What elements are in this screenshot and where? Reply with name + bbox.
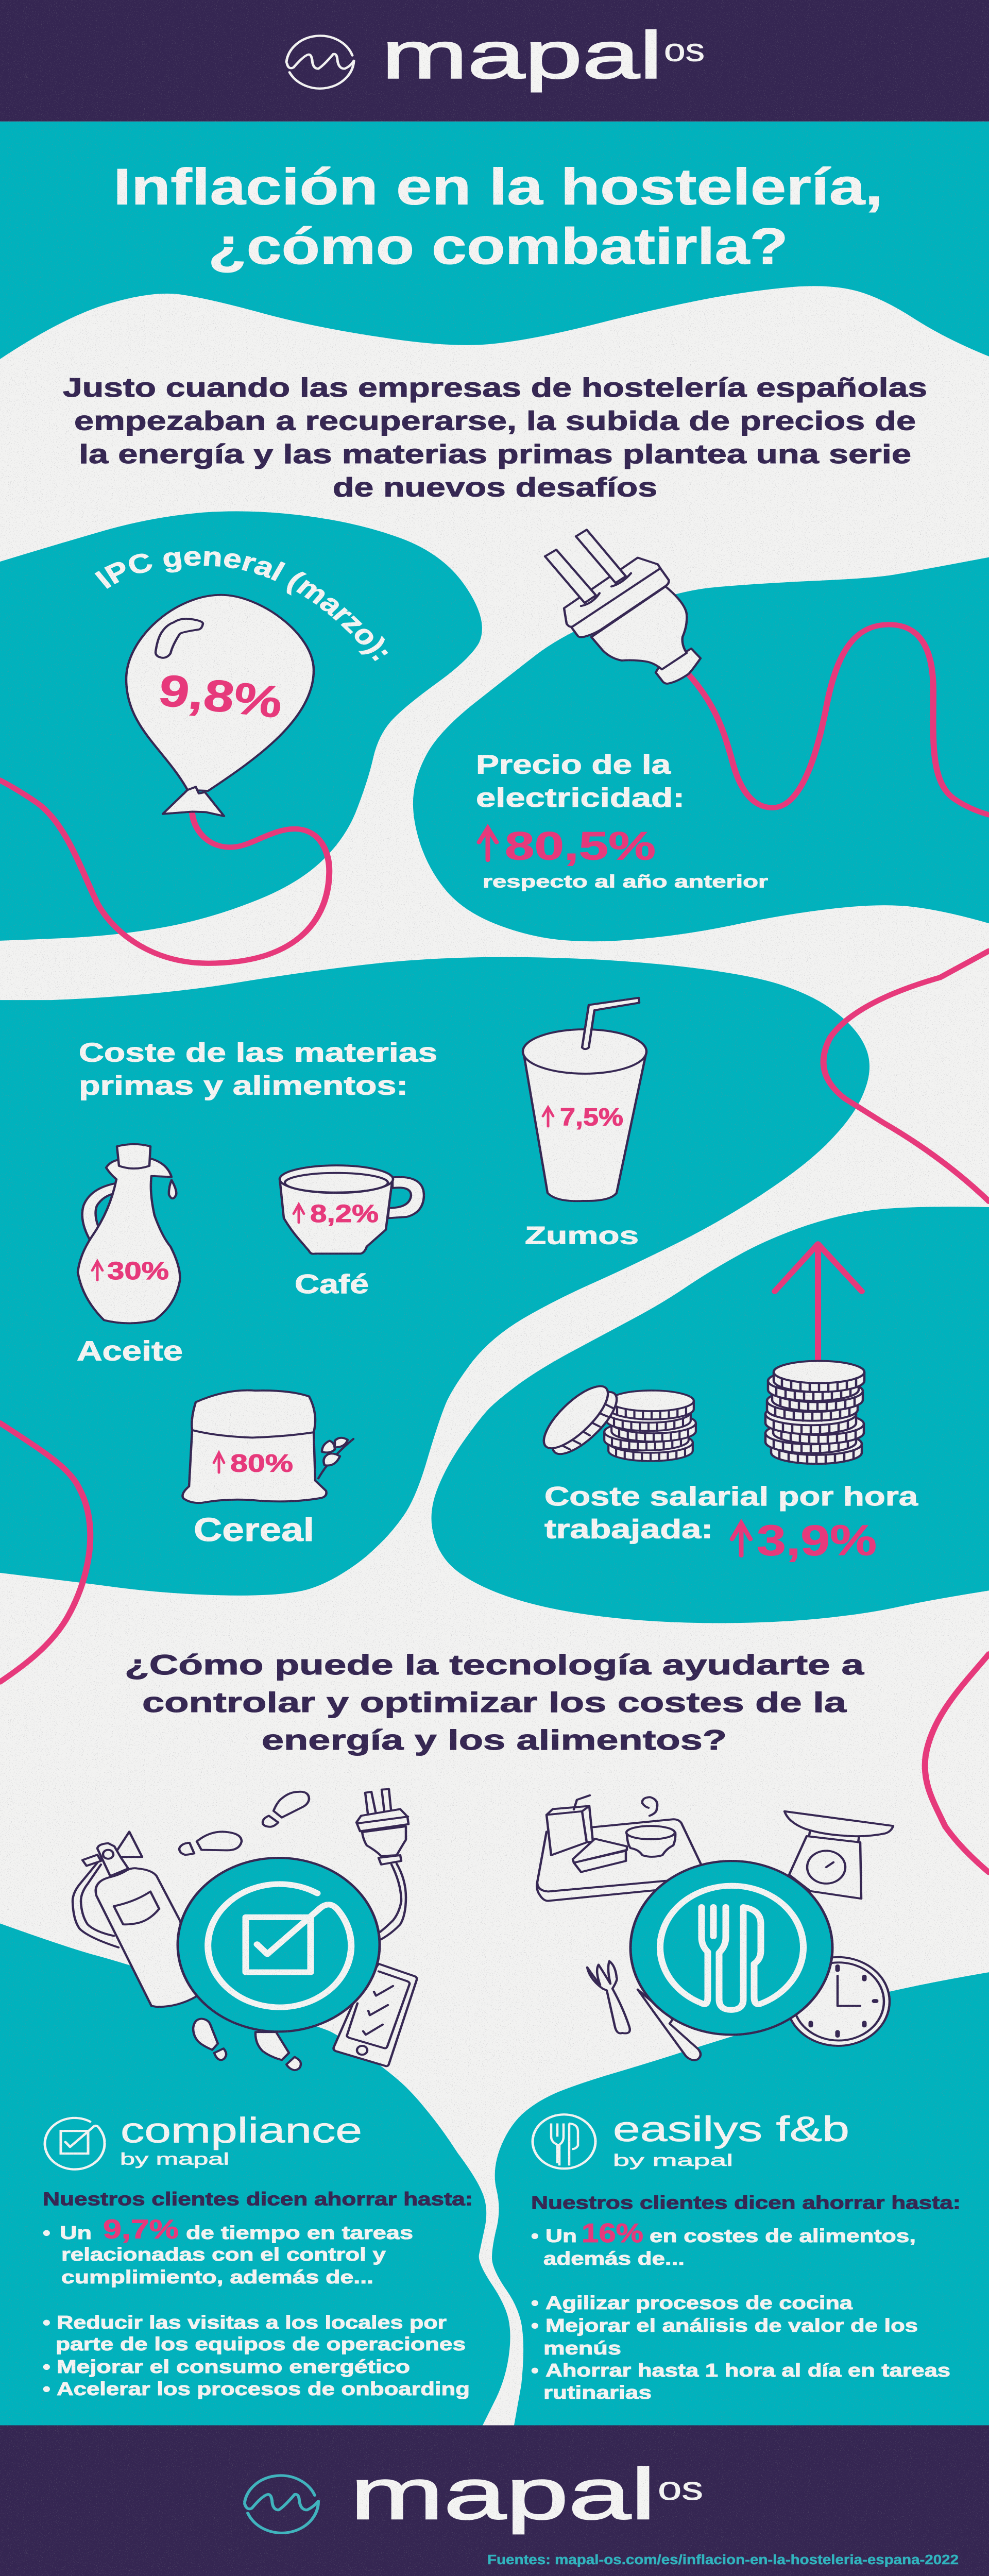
icon: left coin stack xyxy=(604,1391,696,1461)
icon: cutlery circle xyxy=(630,1861,832,2035)
text block: easilys benefits: Agilizar procesos de cocina xyxy=(545,2293,853,2313)
icon: compliance circle xyxy=(178,1858,380,2031)
salary text: trabajada: xyxy=(544,1514,713,1544)
text block: easilys benefits: • xyxy=(531,2293,539,2313)
text block: compliance benefits: • xyxy=(43,2379,50,2399)
text block: compliance benefits: • xyxy=(43,2313,50,2333)
illustration: food items xyxy=(537,1795,893,2060)
intro paragraph: de nuevos desafíos xyxy=(333,472,657,502)
technology heading: ¿Cómo puede la tecnología ayudarte a xyxy=(125,1649,864,1681)
icon: kitchen scale xyxy=(785,1811,893,1899)
electricity text: respecto al año anterior xyxy=(483,871,768,891)
text block: compliance benefits: Mejorar el consumo energético xyxy=(57,2357,410,2377)
icon: coffee cup xyxy=(626,1826,675,1857)
panel: compliance teal blob xyxy=(0,1923,510,2425)
text block: easilys benefits: • xyxy=(531,2360,539,2381)
arrow: oil up xyxy=(92,1261,103,1280)
arrow: electricity up xyxy=(479,828,497,860)
technology heading xyxy=(125,1649,864,1756)
icon: oil bottle xyxy=(78,1144,180,1323)
text block: compliance benefits xyxy=(43,2189,473,2399)
footer band xyxy=(0,2425,989,2576)
text block: compliance benefits: Acelerar los procesos de onboarding xyxy=(57,2379,470,2399)
intro paragraph: la energía y las materias primas plantea una serie xyxy=(79,439,911,469)
text block: easilys benefits: rutinarias xyxy=(543,2382,652,2403)
title xyxy=(113,158,883,275)
cereal percentage: 80% xyxy=(230,1450,293,1478)
logo: compliance: compliance xyxy=(121,2110,362,2150)
text block: compliance benefits: Un xyxy=(60,2223,92,2243)
footer logo: os xyxy=(658,2470,703,2507)
electricity percentage: 80,5% xyxy=(505,823,656,868)
text block: easilys benefits: además de... xyxy=(543,2249,685,2269)
technology heading: controlar y optimizar los costes de la xyxy=(142,1686,847,1718)
icon: standing coin xyxy=(534,1378,627,1462)
illustration: compliance items xyxy=(73,1789,417,2070)
pink wire: plug cable xyxy=(688,624,989,815)
label: Aceite: Aceite xyxy=(77,1336,183,1367)
arrow: juice up xyxy=(543,1107,553,1126)
text block: easilys benefits: Nuestros clientes dicen ahorrar hasta: xyxy=(531,2193,961,2213)
electricity text: Precio de la xyxy=(476,749,671,779)
IPC label text: IPC general (marzo): xyxy=(95,551,388,662)
icon: plug with cable xyxy=(356,1789,408,1940)
text block: compliance benefits: de tiempo en tareas xyxy=(186,2223,413,2243)
icon: fork xyxy=(587,1961,630,2033)
icon: sandwich xyxy=(573,1839,627,1872)
juice percentage: 7,5% xyxy=(560,1104,623,1131)
arrow: salary up xyxy=(775,1244,862,1360)
text block: easilys benefits: • xyxy=(531,2316,539,2336)
panel: top teal wave xyxy=(0,122,989,359)
label: Cereal: Cereal xyxy=(194,1512,314,1548)
logo: compliance: by mapal xyxy=(120,2149,229,2168)
raw materials heading: Coste de las materias xyxy=(79,1038,437,1067)
salary percentage: 3,9% xyxy=(757,1517,877,1565)
logo: easilys f&b xyxy=(533,2109,849,2170)
icon: juice cup xyxy=(523,998,646,1201)
salary text xyxy=(544,1481,918,1565)
stat: 9,7%: 9,7% xyxy=(103,2214,179,2244)
header logo xyxy=(286,18,705,92)
pink wire: balloon string xyxy=(0,780,329,963)
arrow: salary percentage up xyxy=(732,1523,751,1555)
icon: balloon xyxy=(126,595,314,816)
header band xyxy=(0,0,989,122)
footer logo xyxy=(245,2454,703,2534)
curved heading path: IPC general xyxy=(106,566,387,676)
text block: easilys benefits: Un xyxy=(545,2226,577,2246)
text block: easilys benefits: menús xyxy=(543,2338,621,2359)
icon: plug xyxy=(545,530,701,684)
arrow: cereal up xyxy=(214,1453,224,1472)
icon: right coin stack xyxy=(765,1361,864,1464)
text block: easilys benefits: en costes de alimentos, xyxy=(650,2226,916,2246)
icon: wall clock xyxy=(787,1957,890,2046)
header logo: os xyxy=(664,32,705,69)
text block: easilys benefits xyxy=(531,2193,961,2403)
icon: phone checklist xyxy=(334,1964,417,2066)
intro paragraph xyxy=(63,372,927,502)
panel: easilys teal blob xyxy=(492,1972,989,2425)
electricity text: electricidad: xyxy=(476,783,685,812)
technology heading: energía y los alimentos? xyxy=(262,1724,727,1756)
icon: coffee mug xyxy=(280,1165,424,1254)
label: Zumos: Zumos xyxy=(525,1222,639,1249)
text block: compliance benefits: relacionadas con el control y xyxy=(61,2245,386,2265)
footer logo: mapal xyxy=(350,2454,656,2534)
salary text: Coste salarial por hora xyxy=(544,1481,918,1511)
icon: juice box xyxy=(547,1795,593,1855)
raw materials heading: primas y alimentos: xyxy=(79,1070,408,1100)
icon: tray xyxy=(537,1819,708,1901)
text block: compliance benefits: Reducir las visitas a los locales por xyxy=(57,2313,447,2333)
text block: compliance benefits: cumplimiento, además de... xyxy=(61,2267,373,2287)
arrow: coffee up xyxy=(294,1205,304,1223)
intro paragraph: Justo cuando las empresas de hostelería españolas xyxy=(63,372,927,402)
stat: 16%: 16% xyxy=(582,2218,643,2248)
text block: easilys benefits: Ahorrar hasta 1 hora al día en tareas xyxy=(545,2360,950,2381)
icon: table knife xyxy=(638,1990,701,2060)
pink wire: left lower xyxy=(0,1423,90,1682)
header logo: mapal xyxy=(382,18,662,92)
icon: footprints xyxy=(179,1792,309,2070)
pink wire: right lower xyxy=(925,1654,989,1872)
logo: easilys f&b: easilys f&b xyxy=(613,2109,849,2149)
electricity text xyxy=(476,749,768,891)
panel: IPC teal blob xyxy=(0,511,482,941)
source line: Fuentes: mapal-os.com/es/inflacion-en-la-hosteleria-espana-2022 xyxy=(487,2552,959,2567)
coffee percentage: 8,2% xyxy=(310,1200,379,1228)
oil percentage: 30% xyxy=(107,1258,169,1285)
pink wire: right middle xyxy=(824,951,989,1201)
text block: easilys benefits: • xyxy=(531,2226,539,2246)
balloon percentage: 9,8% xyxy=(156,665,285,727)
text block: compliance benefits: Nuestros clientes dicen ahorrar hasta: xyxy=(43,2189,473,2210)
panel: salary teal blob xyxy=(432,1207,989,1623)
panel: raw materials teal blob xyxy=(0,957,869,1596)
logo: compliance xyxy=(45,2110,362,2170)
text block: compliance benefits: parte de los equipos de operaciones xyxy=(56,2334,466,2354)
icon: cereal sack xyxy=(182,1391,353,1503)
icon: fire extinguisher xyxy=(73,1832,197,2007)
intro paragraph: empezaban a recuperarse, la subida de precios de xyxy=(74,406,916,436)
icon: steam xyxy=(642,1797,657,1816)
title: ¿cómo combatirla? xyxy=(208,217,788,275)
title: Inflación en la hostelería, xyxy=(113,158,883,215)
raw materials heading xyxy=(79,1038,437,1100)
logo: easilys f&b: by mapal xyxy=(613,2151,733,2170)
panel: electricity teal blob xyxy=(413,557,989,941)
text block: compliance benefits: • xyxy=(43,2357,50,2377)
label: Café: Café xyxy=(295,1269,369,1299)
text block: easilys benefits: Mejorar el análisis de valor de los xyxy=(545,2316,918,2336)
text block: compliance benefits: • xyxy=(43,2223,50,2243)
